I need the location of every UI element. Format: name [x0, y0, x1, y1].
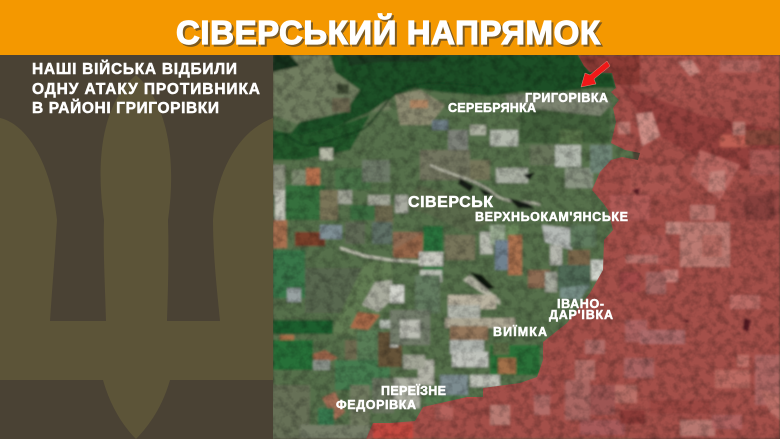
arrow: attack direction — [581, 61, 610, 87]
title: СІВЕРСЬКИЙ НАПРЯМОК — [176, 13, 601, 51]
title shadow: СІВЕРСЬКИЙ НАПРЯМОК — [178, 15, 603, 53]
text block: summary: ОДНУ АТАКУ ПРОТИВНИКА — [32, 81, 260, 98]
text block: summary: НАШІ ВІЙСЬКА ВІДБИЛИ — [32, 60, 237, 78]
trident emblem — [0, 75, 273, 439]
label: Верхньокам'янське: ВЕРХНЬОКАМ'ЯНСЬКЕ — [475, 210, 628, 224]
map labels — [336, 91, 628, 412]
label: Івано-Дар'івка: ІВАНО- — [557, 297, 604, 311]
label: Сіверськ: СІВЕРСЬК — [408, 194, 493, 211]
satellite map — [270, 55, 780, 439]
left panel — [0, 55, 273, 439]
map texture — [273, 55, 780, 439]
header bar — [0, 0, 780, 55]
label: Григорівка: ГРИГОРІВКА — [525, 91, 608, 105]
map: Russian-occupied territory — [366, 55, 780, 439]
text block: summary: В РАЙОНІ ГРИГОРІВКИ — [32, 99, 219, 117]
label: Серебрянка: СЕРЕБРЯНКА — [448, 101, 536, 115]
label: Івано-Дар'івка — [549, 297, 613, 322]
label: Переїзне: ПЕРЕЇЗНЕ — [381, 383, 446, 398]
map: Ukrainian-held terrain — [270, 55, 633, 439]
label: Федорівка: ФЕДОРІВКА — [336, 398, 416, 412]
label: Івано-Дар'івка: ДАР'ІВКА — [549, 308, 613, 322]
label: Виїмка: ВИЇМКА — [493, 324, 547, 339]
text block: summary — [32, 60, 260, 117]
